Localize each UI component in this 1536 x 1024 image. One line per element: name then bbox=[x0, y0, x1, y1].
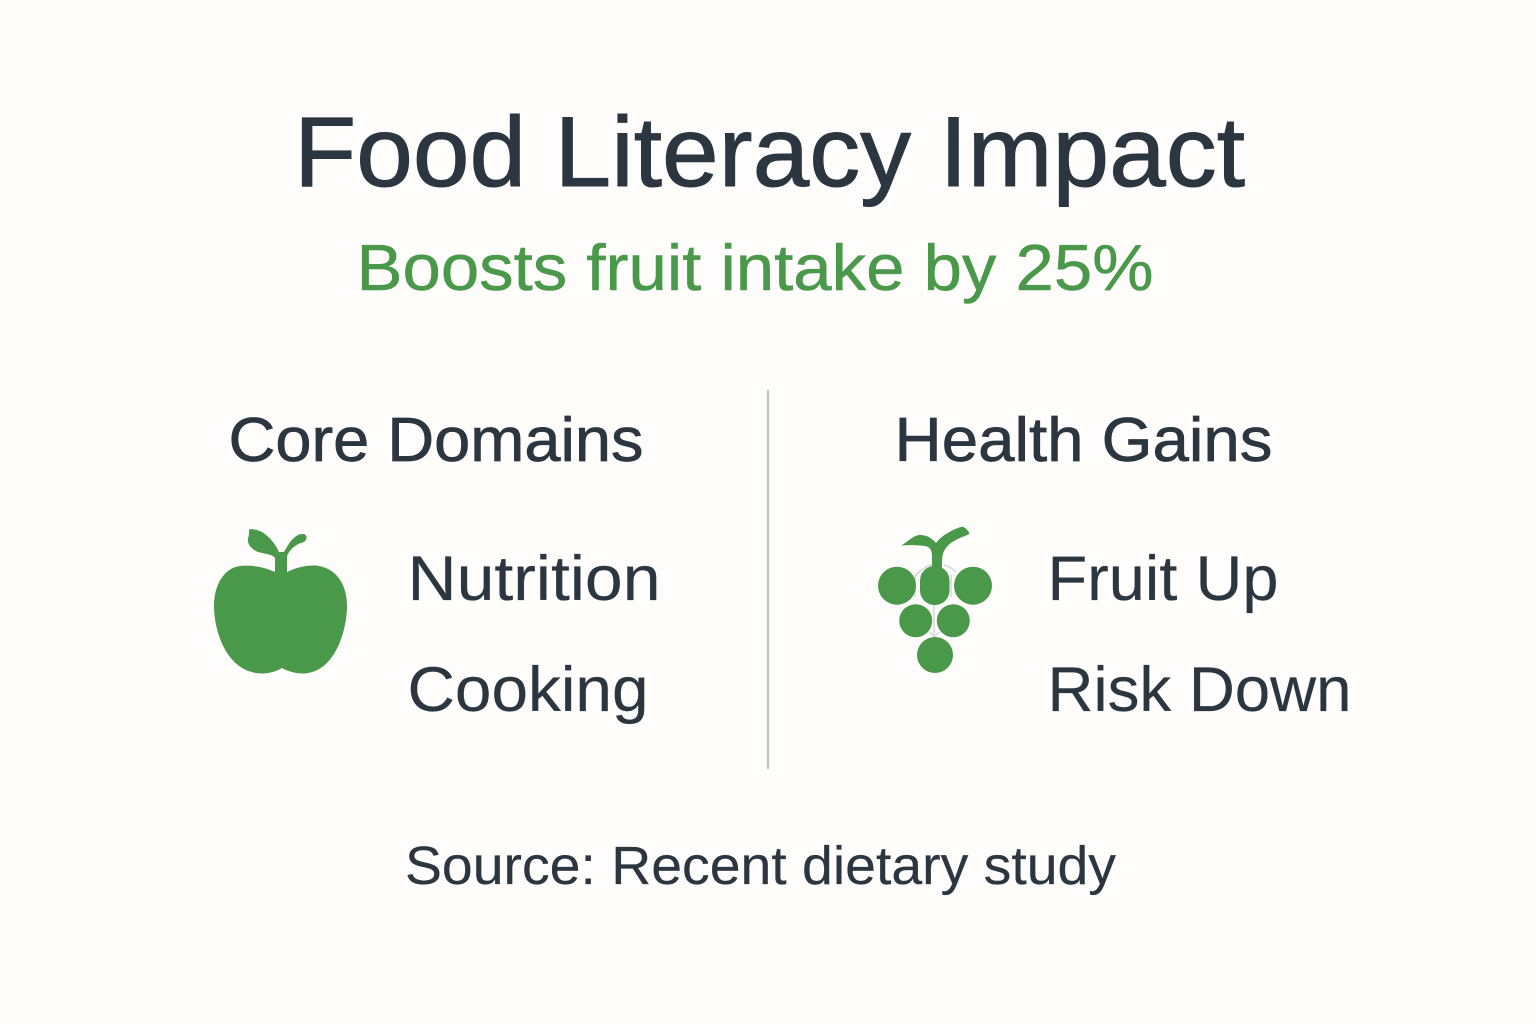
heading: health gains: Health Gains bbox=[894, 406, 1272, 475]
source note: Source: Recent dietary study bbox=[405, 836, 1116, 896]
panel: core domains bbox=[214, 406, 660, 725]
icon: apple bbox=[214, 529, 347, 674]
label: cooking: Cooking bbox=[408, 655, 648, 725]
label: fruit up: Fruit Up bbox=[1048, 544, 1278, 614]
heading: core domains: Core Domains bbox=[228, 406, 644, 475]
label: risk down: Risk Down bbox=[1048, 655, 1352, 725]
label: nutrition: Nutrition bbox=[408, 544, 660, 614]
title: Food Literacy Impact bbox=[294, 96, 1245, 207]
subtitle: Boosts fruit intake by 25% bbox=[356, 231, 1154, 304]
panel: health gains bbox=[878, 406, 1352, 725]
icon: grapes bbox=[878, 526, 992, 673]
